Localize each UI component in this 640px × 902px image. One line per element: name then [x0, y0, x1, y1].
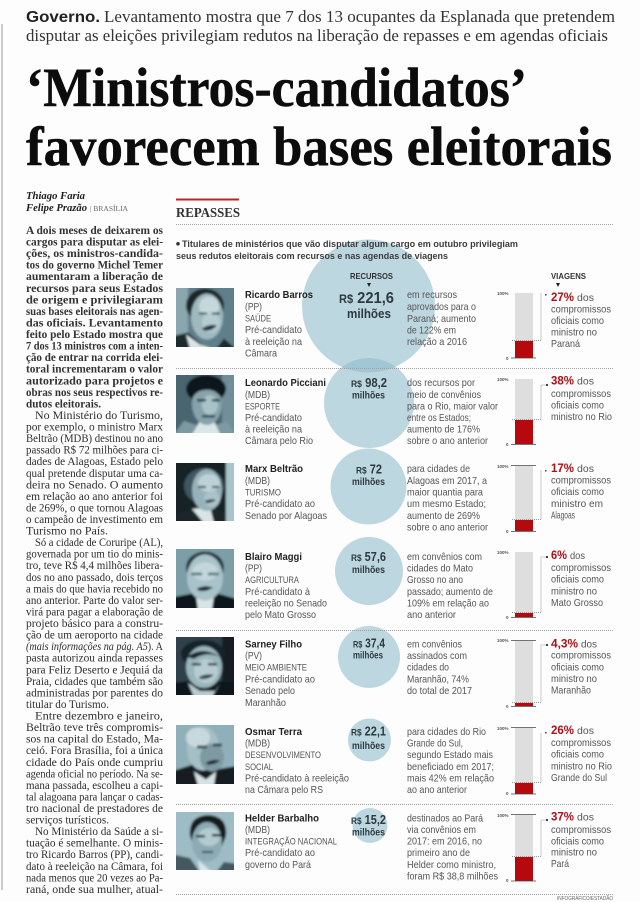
article body text: ceió. Fora Brasília, foi a única: [26, 745, 163, 757]
travel share: dos: [577, 376, 594, 388]
minister details: TURISMO: [245, 488, 281, 498]
resource description: sobre o ano anterior: [407, 436, 488, 447]
article body text: deira no Senado. O aumento: [26, 479, 163, 491]
photo: Ricardo Barros: [176, 288, 234, 347]
article body text: ção de um aeroporto na cidade: [26, 630, 163, 642]
article lead paragraph: de origem e privilegiaram: [26, 294, 164, 306]
travel share: ministro no: [551, 848, 597, 858]
travel share: oficiais como: [551, 662, 604, 674]
bar: 17%: [497, 464, 546, 534]
bar: 38%: 100%: [497, 377, 509, 382]
resource description: [407, 290, 476, 348]
resource description: primeiro ano de: [407, 848, 470, 859]
minister details: ESPORTE: [245, 402, 280, 412]
column header: recursos: [350, 271, 393, 287]
travel share: compromissos: [551, 389, 611, 400]
minister details: MEIO AMBIENTE: [245, 662, 307, 672]
bar: 4,3%: [497, 638, 548, 709]
travel share: 38%: [551, 374, 574, 388]
article body text: virá para pagar a elaboração de: [26, 606, 163, 618]
amount: [351, 376, 387, 402]
minister details: [245, 640, 315, 709]
article lead paragraph: cargos para disputar as elei-: [26, 237, 163, 249]
bar: 38%: [497, 377, 548, 447]
resource description: Grosso no ano: [407, 575, 463, 586]
title: [26, 57, 612, 177]
amount: R$ 57,6: [351, 550, 386, 564]
bar: 27%: 100%: [497, 291, 509, 296]
travel share: ministro no Rio: [551, 762, 612, 772]
travel share: oficiais como: [551, 836, 604, 848]
article body text: governada por um tio do minis-: [26, 549, 163, 561]
minister details: Ricardo Barros: [245, 290, 313, 301]
article lead paragraph: recursos para seus Estados: [26, 283, 164, 295]
minister details: [245, 290, 313, 360]
minister details: Maranhão: [245, 698, 286, 709]
resource description: foram R$ 38,8 milhões: [407, 872, 498, 882]
resource description: segundo Estado mais: [407, 750, 493, 761]
resource description: Maranhão, 74%: [407, 674, 469, 686]
resource description: um mesmo Estado;: [407, 499, 486, 510]
travel share: ministro no: [551, 674, 597, 685]
minister details: SOCIAL: [245, 762, 273, 772]
resource description: aumento de 269%: [407, 511, 480, 522]
article body text: dato à reeleição na Câmara, foi: [26, 861, 163, 873]
minister details: (MDB): [245, 825, 270, 836]
article body text: tro Ricardo Barros (PP), candi-: [26, 849, 163, 861]
photo: Leonardo Picciani: [176, 375, 234, 433]
minister details: pelo Mato Grosso: [245, 610, 316, 621]
photo: Marx Beltrão: [176, 463, 234, 521]
resource description: [407, 464, 488, 534]
resource description: passado; aumento de: [407, 587, 493, 598]
minister details: [245, 814, 337, 871]
article body text: administradas por parentes do: [26, 687, 163, 699]
travel share: Maranhão: [551, 686, 591, 696]
row: Osmar Terra: [171, 720, 612, 796]
minister details: [245, 464, 327, 522]
travel share: oficiais como: [551, 487, 604, 498]
minister details: AGRICULTURA: [245, 575, 300, 585]
article body text: dades de Alagoas, Estado pelo: [26, 456, 163, 468]
row: Ricardo Barros: [171, 284, 611, 361]
travel share: Grande do Sul: [551, 773, 607, 784]
amount: [353, 636, 385, 662]
resource description: mais 42% em relação: [407, 774, 494, 784]
travel share: 6%: [551, 548, 567, 562]
article body text: Praia, cidades que também são: [26, 676, 163, 688]
resource description: entre os Estados;: [407, 413, 471, 424]
bar: 37%: [497, 813, 548, 883]
article body text: No Ministério do Turismo,: [35, 410, 163, 422]
amount: R$ 15,2: [351, 813, 386, 827]
minister details: Câmara pelo Rio: [245, 436, 313, 447]
minister details: [245, 378, 326, 447]
resource description: em convênios: [407, 640, 462, 650]
resource description: via convênios em: [407, 825, 476, 836]
photo: Blairo Maggi: [176, 549, 234, 608]
article lead paragraph: das oficiais. Levantamento: [26, 318, 163, 330]
travel share: compromissos: [551, 476, 611, 486]
article body text: ano anterior. Parte do valor ser-: [26, 595, 163, 607]
minister details: Pré-candidato ao: [245, 848, 315, 859]
travel share: 27%: [551, 290, 574, 304]
bar: 6%: 0: [506, 615, 509, 620]
travel share: dos: [577, 726, 594, 737]
row: Marx Beltrão: [171, 458, 611, 534]
travel share: dos: [577, 293, 594, 304]
deck: kicker and summary: [26, 7, 615, 45]
article body text: Beltrão teve três compromis-: [26, 722, 163, 734]
bar: 38%: 0: [506, 442, 509, 447]
article lead paragraph: dutos eleitorais.: [26, 398, 101, 410]
travel share: 37%: [551, 810, 574, 824]
article lead paragraph: ção de entrar na corrida elei-: [26, 352, 163, 364]
minister details: à reeleição na: [245, 337, 302, 348]
minister details: Câmara: [245, 348, 277, 360]
resource description: cidades do: [407, 662, 449, 674]
amount: R$ 98,2: [351, 376, 387, 390]
resource description: sobre o ano anterior: [407, 522, 488, 534]
article lead paragraph: 7 dos 13 ministros com a inten-: [26, 341, 163, 353]
minister details: Marx Beltrão: [245, 464, 303, 475]
minister details: (PP): [245, 302, 262, 313]
minister details: Pré-candidato ao: [245, 499, 315, 510]
resource description: cidades do Mato: [407, 564, 473, 574]
minister details: Leonardo Picciani: [245, 378, 326, 389]
travel share: Pará: [551, 859, 569, 870]
minister details: Pré-candidato à reeleição: [245, 774, 349, 784]
bar: 26%: 0: [506, 791, 509, 796]
article body text: titular do Turismo.: [26, 699, 109, 711]
resource description: 109% em relação ao: [407, 598, 489, 610]
article body text: qual pretende disputar uma ca-: [26, 468, 163, 480]
resource description: 2017: em 2016, no: [407, 836, 482, 848]
travel share: ministro no: [551, 586, 597, 598]
travel share: oficiais como: [551, 400, 604, 412]
article body text: projeto básico para a constru-: [26, 618, 163, 630]
article body text: No Ministério da Saúde a si-: [35, 826, 163, 838]
deck: kicker and summary: Governo.: [26, 9, 100, 26]
column header: recursos: RECURSOS: [350, 271, 393, 281]
amount: R$ 221,6: [339, 290, 394, 307]
byline: Thiago Faria: [26, 191, 85, 202]
article body text: Entre dezembro e janeiro,: [35, 710, 163, 722]
resource description: [407, 727, 494, 796]
article body text: agenda oficial no período. Na se-: [26, 768, 163, 780]
column header: viagens: [551, 271, 586, 287]
byline: | BRASÍLIA: [90, 205, 128, 213]
resource description: para cidades do Rio: [407, 727, 486, 738]
article body text: tuação é semelhante. O minis-: [26, 838, 163, 850]
resource description: dos recursos por: [407, 378, 475, 389]
photo: Helder Barbalho: [176, 812, 234, 870]
row: Leonardo Picciani: [171, 370, 612, 447]
article body text: mana passada, escolheu a capi-: [26, 780, 163, 792]
bar: 37%: 100%: [497, 813, 509, 818]
minister details: na Câmara pelo RS: [245, 785, 323, 796]
travel share: compromissos: [551, 650, 611, 662]
article body text: pasta autorizou ainda repasses: [26, 653, 164, 665]
travel share: oficiais como: [551, 750, 604, 760]
minister details: Sarney Filho: [245, 640, 302, 650]
resource description: meio de convênios: [407, 390, 481, 401]
travel share: ministro em: [551, 499, 603, 510]
title: ‘Ministros-candidatos’: [26, 57, 527, 118]
travel share: dos: [570, 551, 585, 562]
minister details: Senado por Alagoas: [245, 511, 327, 522]
resource description: [407, 814, 498, 882]
travel share: 26%: [551, 723, 574, 737]
article body text: Só a cidade de Coruripe (AL),: [35, 537, 163, 549]
bubbles: resources by minister: [302, 240, 435, 843]
article lead paragraph: toral incrementaram o valor: [26, 364, 163, 376]
resource description: [407, 552, 493, 621]
article body text: para Feliz Deserto e Jequiá da: [26, 664, 163, 676]
row: Helder Barbalho: [171, 807, 611, 883]
credit: INFOGRÁFICO/ESTADÃO: [557, 895, 614, 902]
byline: Felipe Prazão: [25, 203, 87, 214]
bar: 27%: [497, 291, 546, 361]
travel share: [551, 290, 611, 350]
travel share: dos: [581, 640, 597, 650]
section heading: repasses: REPASSES: [176, 206, 240, 221]
article lead paragraph: autorizado para projetos e: [26, 375, 163, 387]
article body text: nada menos que 20 vezes ao Pa-: [26, 872, 163, 884]
bar: 26%: 100%: [497, 726, 509, 731]
travel share: 17%: [551, 461, 574, 475]
intro note: seus redutos eleitorais com recursos e nas agendas de viagens: [176, 251, 448, 262]
article body text: passado R$ 72 milhões para ci-: [26, 445, 163, 457]
row: Blairo Maggi: [171, 544, 611, 621]
article body text: tro, teve R$ 4,4 milhões libera-: [26, 560, 163, 572]
minister details: (MDB): [245, 476, 270, 487]
article lead paragraph: tos do governo Michel Temer: [26, 260, 163, 272]
minister details: [245, 727, 349, 796]
minister details: [245, 552, 327, 621]
travel share: compromissos: [551, 738, 611, 749]
article lead paragraph: ções, os ministros-candida-: [26, 248, 163, 260]
resource description: em convênios com: [407, 552, 482, 563]
resource description: destinados ao Pará: [407, 814, 483, 824]
travel share: ministro no Rio: [551, 412, 612, 423]
minister details: governo do Pará: [245, 860, 311, 871]
minister details: (PV): [245, 651, 262, 662]
column header: viagens: VIAGENS: [551, 271, 586, 281]
resource description: relação a 2016: [407, 337, 467, 348]
article lead paragraph: feito pelo Estado mostra que: [26, 329, 163, 341]
article lead paragraph: suas bases eleitorais nas agen-: [26, 306, 163, 318]
resource description: [407, 640, 472, 697]
article lead paragraph: A dois meses de deixarem os: [26, 225, 164, 237]
bar: 37%: 0: [506, 878, 509, 883]
amount: milhões: [352, 390, 385, 402]
travel share: [551, 810, 611, 870]
photo: Osmar Terra: [176, 725, 234, 784]
article body text: cidade do País onde cumpriu: [26, 757, 163, 769]
travel share: [551, 374, 612, 423]
resource description: beneficiado em 2017;: [407, 762, 494, 773]
section heading: repasses: [176, 198, 240, 221]
resource description: ano anterior: [407, 610, 456, 621]
resource description: Helder como ministro,: [407, 860, 496, 871]
amount: [339, 290, 394, 321]
minister details: (MDB): [245, 390, 270, 401]
travel share: [551, 723, 612, 784]
travel share: compromissos: [551, 304, 611, 316]
bar: 26%: [497, 726, 546, 796]
resource description: aprovados para o: [407, 302, 476, 313]
article body text: por exemplo, o ministro Marx: [26, 422, 163, 434]
bar: 17%: 100%: [497, 464, 509, 469]
resource description: assinados com: [407, 651, 467, 662]
deck: kicker and summary: disputar as eleições privilegiam redutos na liberação de repasses e em agendas oficiais: [26, 26, 608, 45]
article body text: em relação ao ano anterior foi: [26, 491, 163, 503]
resource description: Grande do Sul,: [407, 738, 463, 750]
article body text: tal alagoana para lançar o cadas-: [26, 791, 163, 803]
article body text: dos no ano passado, dois terços: [26, 572, 164, 584]
deck: kicker and summary: Levantamento mostra que 7 dos 13 ocupantes da Esplanada que pretendem: [104, 7, 615, 26]
article body text: a mais do que havia recebido no: [26, 583, 163, 595]
amount: R$ 72: [356, 462, 382, 476]
minister details: Pré-candidato: [245, 325, 302, 336]
article lead paragraph: obras nos seus respectivos re-: [26, 387, 163, 399]
travel share: [551, 636, 611, 696]
resource description: ao ano anterior: [407, 785, 467, 796]
article body text: raná, onde sua mulher, atual-: [26, 884, 163, 896]
bar: 6%: 100%: [497, 550, 509, 555]
minister details: INTEGRAÇÃO NACIONAL: [245, 836, 337, 846]
amount: R$ 37,4: [353, 636, 385, 650]
photo: Sarney Filho: [176, 637, 234, 695]
minister details: à reeleição na: [245, 424, 302, 436]
amount: [352, 462, 385, 488]
resource description: maior quantia para: [407, 488, 483, 498]
amount: milhões: [347, 306, 391, 321]
minister details: Osmar Terra: [245, 727, 302, 738]
minister details: Pré-candidato à: [245, 587, 310, 598]
travel share: 4,3%: [551, 636, 578, 650]
article body text: tro nacional de prestadores de: [26, 803, 163, 815]
intro note: [176, 239, 518, 262]
minister details: reeleição no Senado: [245, 598, 327, 610]
resource description: [407, 378, 498, 447]
bar: 27%: 0: [506, 356, 509, 361]
minister details: Helder Barbalho: [245, 814, 319, 824]
article body text: o campeão de investimento em: [26, 514, 163, 526]
article body text: Turismo no País.: [26, 526, 108, 538]
article lead paragraph: [26, 225, 164, 410]
travel share: dos: [577, 464, 594, 475]
minister details: Blairo Maggi: [245, 552, 302, 563]
resource description: de 122% em: [407, 326, 456, 336]
amount: [351, 813, 386, 838]
travel share: dos: [577, 812, 594, 824]
amount: R$ 22,1: [351, 724, 386, 738]
resource description: em recursos: [407, 290, 457, 301]
minister details: DESENVOLVIMENTO: [245, 750, 321, 760]
intro note: Titulares de ministérios que vão disputar algum cargo em outubro privilegiam: [182, 239, 518, 250]
minister details: Pré-candidato: [245, 413, 302, 424]
resource description: do total de 2017: [407, 686, 472, 697]
article body text: sos na capital do Estado, Ma-: [26, 734, 163, 746]
travel share: Paraná: [551, 339, 580, 350]
minister details: SAÚDE: [245, 314, 271, 324]
minister details: Senado pelo: [245, 686, 295, 697]
travel share: [551, 548, 611, 609]
resource description: Paraná; aumento: [407, 314, 476, 325]
bar: 6%: [497, 550, 548, 620]
travel share: Mato Grosso: [551, 598, 603, 609]
travel share: ministro no: [551, 328, 597, 338]
minister details: (PP): [245, 564, 262, 574]
resource description: para cidades de: [407, 464, 470, 475]
amount: milhões: [352, 741, 385, 752]
amount: milhões: [352, 565, 385, 576]
article body text: Beltrão (MDB) destinou no ano: [26, 433, 163, 445]
article lead paragraph: aumentaram a liberação de: [26, 271, 163, 283]
article body text: [26, 410, 164, 896]
amount: milhões: [353, 650, 383, 662]
amount: [351, 724, 386, 752]
travel share: Alagoas: [551, 510, 575, 522]
travel share: compromissos: [551, 563, 611, 574]
resource description: Alagoas em 2017, a: [407, 476, 487, 487]
travel share: [551, 461, 611, 522]
travel share: oficiais como: [551, 316, 604, 327]
title: favorecem bases eleitorais: [26, 116, 612, 177]
article body text: serviços turísticos.: [26, 815, 109, 827]
bar: 4,3%: 0: [506, 704, 509, 709]
bar: 17%: 0: [506, 529, 509, 534]
article body text: (mais informações na pág. A5). A: [26, 641, 164, 653]
travel share: compromissos: [551, 825, 611, 836]
travel share: oficiais como: [551, 574, 604, 586]
minister details: (MDB): [245, 738, 270, 750]
resource description: para o Rio, maior valor: [407, 402, 498, 412]
amount: milhões: [352, 477, 385, 488]
byline: [25, 191, 128, 214]
resource description: aumento de 176%: [407, 424, 480, 436]
minister details: Pré-candidato ao: [245, 674, 315, 686]
amount: milhões: [352, 828, 385, 838]
amount: [351, 550, 386, 576]
bar: 4,3%: 100%: [497, 638, 509, 643]
row: Sarney Filho: [171, 632, 611, 709]
article body text: de 269%, o que tornou Alagoas: [26, 502, 164, 514]
